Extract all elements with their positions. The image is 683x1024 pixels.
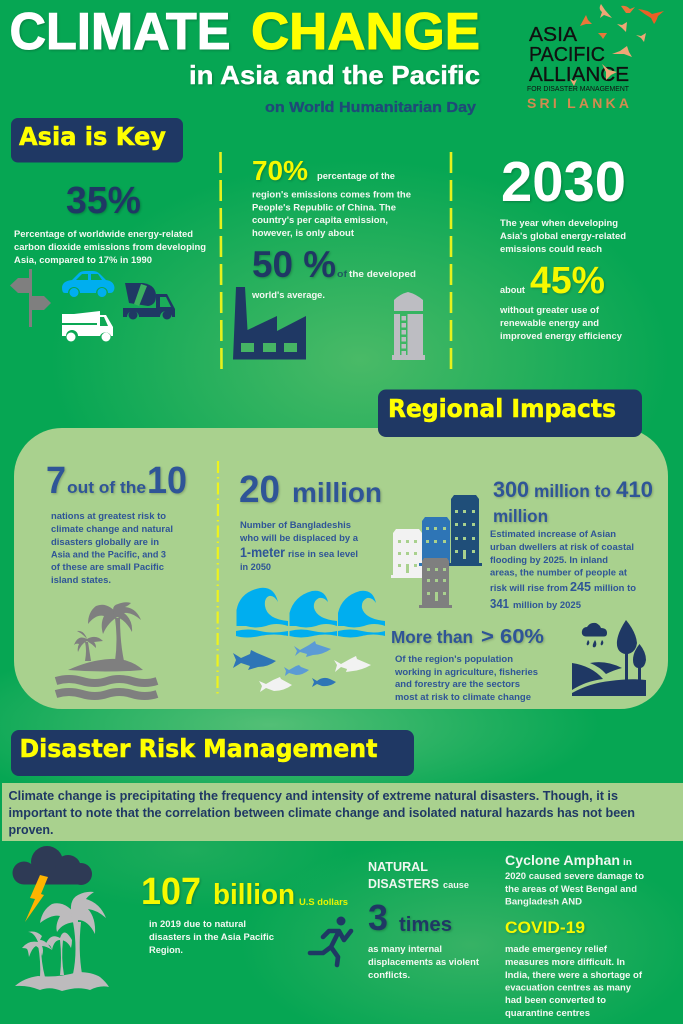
logo: Asia Pacific Alliance Sri Lanka: SRI LANKA <box>527 95 629 111</box>
text: of the developed world's average: world's average. <box>251 290 325 301</box>
stat: 20 million: million <box>292 477 382 508</box>
text: urban dwellers at risk: risk will rise from <box>490 583 568 594</box>
text: 2030 description: Asia's global energy-related <box>500 231 626 242</box>
text: of the developed world's average: of <box>337 269 348 280</box>
heading: Asia is Key: Asia is Key <box>19 122 166 151</box>
text: 2030 description <box>500 218 626 296</box>
text: agriculture, fisheries and forestry: most at risk to climate change <box>395 692 531 703</box>
stat: 300 million to 410 million: million to <box>534 481 611 501</box>
text: urban dwellers at risk: 245 <box>570 579 591 594</box>
stat: 20 million: 20 <box>239 469 280 511</box>
text: COVID-19 description: measures more difficult. In <box>505 957 625 968</box>
heading: Disaster Risk Management <box>11 730 414 776</box>
stat: 50%: 50 % <box>252 244 336 285</box>
icon: cement mixer truck <box>123 283 175 320</box>
text: 2019 natural disasters: Region. <box>149 945 183 956</box>
icon: white dump truck <box>62 311 113 342</box>
text: emissions from China <box>252 171 411 239</box>
stat: 7 out of the 10: 7 <box>46 460 66 502</box>
icon: rain cloud, trees and hills <box>572 620 646 696</box>
text: Cyclone Amphan <box>505 853 644 908</box>
icon: three waves <box>236 588 385 638</box>
text: urban dwellers at risk: million to <box>594 583 636 594</box>
panel: regional impacts <box>14 428 668 709</box>
text: without greater use of renewable energy <box>499 305 623 342</box>
text: COVID-19 description <box>505 944 643 1019</box>
text: natural disasters cause: NATURAL <box>368 860 428 874</box>
text: 2030 description: emissions could reach <box>500 244 602 255</box>
text: internal displacements: displacements as violent <box>368 957 480 968</box>
text: nations at greatest risk: island states. <box>51 575 111 586</box>
stat: more than 60%: > 60% <box>481 625 544 648</box>
stat: more than 60% <box>391 625 544 648</box>
title <box>10 3 480 61</box>
text: COVID-19 description: made emergency relief <box>505 944 608 955</box>
icon: palm island <box>56 602 157 696</box>
text: emissions from China: People's Republic of China. The <box>252 202 396 214</box>
stat: 3 times: times <box>399 913 452 936</box>
text: agriculture, fisheries and forestry: working in agriculture, fisheries <box>394 667 538 678</box>
stat: 107 billion <box>141 871 295 913</box>
subtitle: in Asia and the Pacific <box>189 60 480 90</box>
text: urban dwellers at risk: areas, the number of people at <box>490 568 628 578</box>
heading: COVID-19: COVID-19 <box>505 919 585 937</box>
text: internal displacements <box>368 944 480 981</box>
stat: more than 60%: More than <box>391 627 473 647</box>
callout: disaster intro strip: Climate change is precipitating the frequency and intensity of extreme natural disasters. Though, it is <box>8 788 618 803</box>
text: natural disasters cause: cause <box>443 880 469 891</box>
stat: 45%: 45% <box>530 260 605 302</box>
logo: Asia Pacific Alliance Sri Lanka: ALLIANCE <box>529 64 629 86</box>
text: nations at greatest risk: nations at greatest risk to <box>51 511 166 522</box>
icon: running person <box>310 916 351 965</box>
title: CHANGE <box>251 3 480 61</box>
text: nations at greatest risk: of these are small Pacific <box>51 562 165 573</box>
logo: Asia Pacific Alliance Sri Lanka: FOR DISASTER MANAGEMENT <box>527 86 630 93</box>
tagline: on World Humanitarian Day <box>265 100 476 116</box>
text: 2019 natural disasters <box>149 919 275 956</box>
icon: fish school <box>233 641 371 692</box>
stat: 70%: 70% <box>252 155 308 186</box>
text: COVID-19 description: quarantine centres <box>505 1008 590 1019</box>
heading: Disaster Risk Management: Disaster Risk Management <box>20 734 378 763</box>
icon: palm trees on island <box>15 892 109 991</box>
heading: Asia is Key <box>11 118 183 162</box>
stat: 300 million to 410 million: 410 <box>616 477 653 502</box>
callout: disaster intro strip <box>2 783 683 841</box>
text: of the developed world's average <box>251 269 416 301</box>
text: emissions from China: percentage of the <box>317 171 395 182</box>
icon: signpost <box>10 269 51 327</box>
title: CLIMATE <box>10 3 230 61</box>
text: natural disasters cause <box>368 860 469 891</box>
text: 2019 natural disasters: disasters in the Asia Pacific <box>149 932 275 943</box>
text: urban dwellers at risk: urban dwellers at risk of coastal <box>490 542 634 553</box>
logo: Asia Pacific Alliance Sri Lanka <box>527 4 664 111</box>
divider: yellow dash-dot line <box>216 461 219 695</box>
text: 35% description: carbon dioxide emissions from developing <box>14 242 206 253</box>
text: without greater use of renewable energy: renewable energy and <box>500 318 599 329</box>
icon: city buildings <box>391 495 482 608</box>
text: 35% description: Asia, compared to 17% in 1990 <box>14 255 152 266</box>
text: emissions from China: however, is only about <box>252 228 355 239</box>
text: internal displacements: conflicts. <box>368 970 410 981</box>
text: COVID-19 description: India, there were a shortage of <box>505 970 643 981</box>
text: of the developed world's average: the developed <box>349 269 416 280</box>
text: Cyclone Amphan: in <box>623 857 632 868</box>
text: nations at greatest risk: climate change and natural <box>51 524 173 535</box>
icon: blue car <box>62 271 114 297</box>
text: Bangladeshis displaced: who will be displaced by a <box>239 533 359 544</box>
callout: disaster intro strip: proven. <box>8 822 54 837</box>
stat: 2030: 2030 <box>501 150 626 214</box>
text: Bangladeshis displaced: Number of Bangladeshis <box>240 520 351 531</box>
text: without greater use of renewable energy: without greater use of <box>499 305 600 316</box>
text: Cyclone Amphan: Bangladesh AND <box>505 896 582 908</box>
text: Cyclone Amphan: the areas of West Bengal and <box>505 884 637 895</box>
text: natural disasters cause: DISASTERS <box>368 877 439 891</box>
stat: 35%: 35% <box>66 180 141 222</box>
text: U.S dollars: U.S dollars <box>299 897 348 908</box>
text: nations at greatest risk: disasters globally are in <box>51 537 159 548</box>
divider: yellow dashed line right <box>450 152 452 371</box>
text: emissions from China: region's emissions comes from the <box>252 190 411 200</box>
text: Bangladeshis displaced <box>239 520 359 573</box>
text: 2030 description: about <box>500 285 526 296</box>
text: COVID-19 description: evacuation centres as many <box>505 982 632 994</box>
text: agriculture, fisheries and forestry: and forestry are the sectors <box>395 679 520 690</box>
text: urban dwellers at risk: Estimated increase of Asian <box>490 529 616 540</box>
text: 2019 natural disasters: in 2019 due to natural <box>149 919 246 930</box>
logo: Asia Pacific Alliance Sri Lanka: PACIFIC <box>529 44 605 66</box>
text: 35% description <box>14 229 206 266</box>
text: urban dwellers at risk: flooding by 2025. In inland <box>490 555 608 566</box>
stat: 107 billion: billion <box>213 879 295 911</box>
stat: 7 out of the 10 <box>46 460 187 502</box>
text: agriculture, fisheries and forestry <box>394 654 538 703</box>
text: nations at greatest risk <box>51 511 173 586</box>
text: urban dwellers at risk <box>490 529 636 611</box>
text: Bangladeshis displaced: 1-meter <box>240 545 286 560</box>
stat: 107 billion: 107 <box>141 871 201 913</box>
text: urban dwellers at risk: 341 <box>490 596 509 611</box>
text: Cyclone Amphan: Cyclone Amphan <box>505 853 620 868</box>
text: emissions from China: country's per capita emission, <box>252 215 388 226</box>
text: 35% description: Percentage of worldwide energy-related <box>14 229 193 240</box>
icon: factory <box>233 287 306 360</box>
stat: 300 million to 410 million: million <box>493 506 548 526</box>
stat: 7 out of the 10: out of the <box>67 478 146 497</box>
text: Bangladeshis displaced: rise in sea level <box>288 549 358 560</box>
divider: yellow dashed line left <box>220 152 222 371</box>
logo: Asia Pacific Alliance Sri Lanka: ASIA <box>529 24 578 46</box>
callout: disaster intro strip: important to note that the correlation between climate change and isolated natural hazards has not been <box>8 805 635 820</box>
stat: 300 million to 410 million <box>493 477 653 526</box>
text: internal displacements: as many internal <box>368 944 442 955</box>
text: Cyclone Amphan: 2020 caused severe damage to <box>505 871 644 882</box>
heading: Regional Impacts: Regional Impacts <box>388 394 616 423</box>
stat: 20 million <box>239 469 382 511</box>
text: urban dwellers at risk: million by 2025 <box>513 600 582 611</box>
text: 2030 description: The year when developing <box>500 218 618 229</box>
text: COVID-19 description: had been converted to <box>505 995 606 1006</box>
stat: 300 million to 410 million: 300 <box>493 477 529 502</box>
stat: 3 times <box>368 897 452 938</box>
text: agriculture, fisheries and forestry: Of the region's population <box>395 654 513 665</box>
icon: storm cloud with lightning <box>12 846 92 922</box>
stat: 7 out of the 10: 10 <box>147 460 187 502</box>
icon: grey tower <box>392 292 425 360</box>
text: Bangladeshis displaced: in 2050 <box>240 562 271 573</box>
text: without greater use of renewable energy: improved energy efficiency <box>500 331 623 342</box>
text: nations at greatest risk: Asia and the Pacific, and 3 <box>51 550 166 560</box>
heading: Regional Impacts <box>378 390 642 437</box>
stat: 3 times: 3 <box>368 897 388 938</box>
